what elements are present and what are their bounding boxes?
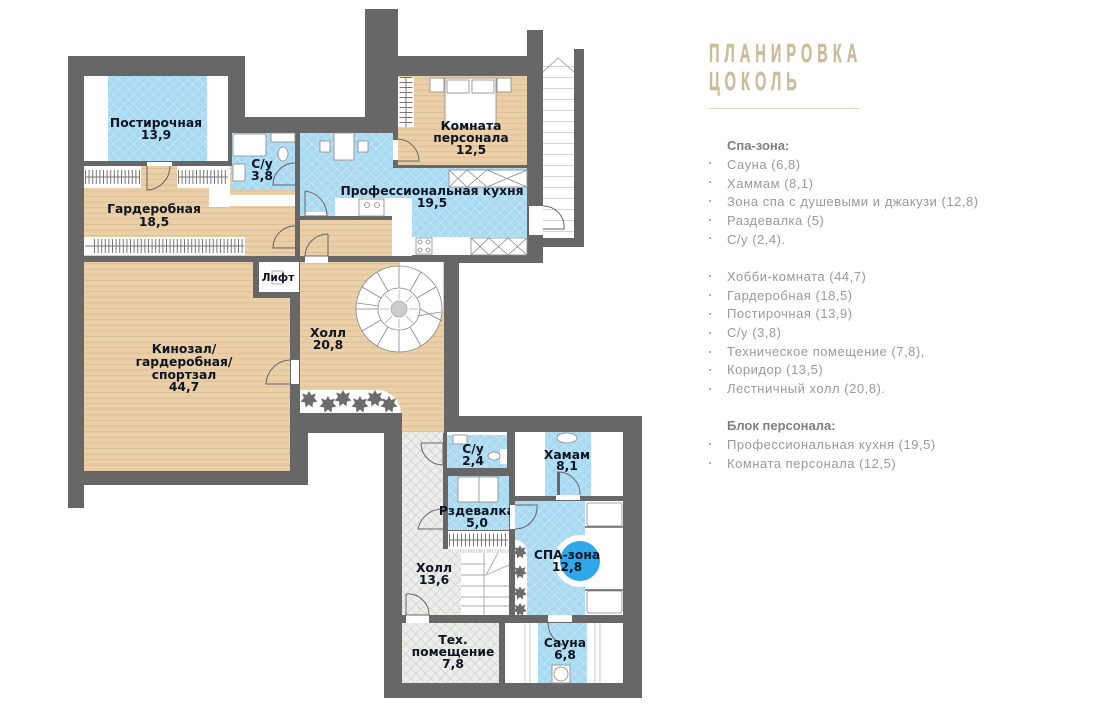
room: Холл 20,8: Холл — [310, 326, 346, 340]
room: Кинозал — [84, 262, 299, 471]
room: СПА-зона: 12,8 — [552, 560, 582, 574]
list: Спа-зона: Сауна (6,8) — [727, 157, 801, 172]
room: С/у 3,8: 3,8 — [251, 169, 273, 183]
planter: Холл — [300, 390, 401, 413]
room: Постирочная — [84, 76, 228, 161]
room: Постирочная: Постирочная — [110, 116, 202, 130]
room: Сауна — [505, 615, 623, 683]
room: Профессиональная кухня: 19,5 — [417, 196, 447, 210]
room: Холл 13,6: 13,6 — [419, 573, 449, 587]
room: Комната персонала: персонала — [433, 131, 509, 145]
room: С/у 3,8: С/у — [251, 157, 273, 171]
list: Спа-зона: Раздевалка (5) — [727, 213, 824, 228]
list: Блок персонала — [709, 418, 936, 471]
list: помещения: Техническое помещение (7,8), — [727, 344, 925, 359]
lift: Лифт — [262, 272, 295, 284]
list: Спа-зона: Зона спа с душевыми и джакузи (12,8) — [727, 194, 979, 209]
lift — [259, 262, 299, 292]
room: Тех. помещение: помещение — [412, 645, 494, 659]
room: С/у 2,4 — [447, 432, 507, 468]
room: Кинозал: Кинозал/ — [152, 342, 217, 356]
room: Хамам: Хамам — [544, 448, 590, 462]
room: Сауна: 6,8 — [554, 648, 576, 662]
room: С/у 3,8 — [232, 133, 295, 190]
room: Гардеробная — [84, 162, 295, 256]
outer stair — [529, 49, 584, 247]
room: Рздевалка — [439, 476, 515, 549]
list: помещения: Гардеробная (18,5) — [727, 288, 853, 303]
room: Комната персонала — [393, 76, 527, 165]
title: ПЛАНИРОВКА — [709, 40, 862, 68]
list: помещения: Постирочная (13,9) — [727, 306, 853, 321]
room: Тех. помещение: 7,8 — [442, 657, 464, 671]
room: Холл 13,6: Холл — [416, 561, 452, 575]
room: СПА-зона — [510, 501, 623, 616]
room: Комната персонала: Комната — [441, 119, 501, 133]
room: Комната персонала: 12,5 — [456, 143, 486, 157]
room: С/у 2,4: 2,4 — [462, 454, 484, 468]
room: Тех. помещение: Тех. — [438, 633, 468, 647]
room: Сауна: Сауна — [544, 636, 586, 650]
room: Гардеробная: Гардеробная — [107, 202, 201, 216]
list: Блок персонала: Комната персонала (12,5) — [727, 456, 896, 471]
room: Холл 20,8: 20,8 — [313, 338, 343, 352]
list: Спа-зона: Спа-зона: — [727, 138, 789, 153]
divider — [707, 108, 860, 109]
title — [709, 40, 862, 96]
room: Рздевалка: Рздевалка — [439, 504, 515, 518]
list: Блок персонала: Блок персонала: — [727, 418, 836, 433]
room: Хамам — [515, 432, 623, 500]
title: ЦОКОЛЬ — [709, 68, 802, 96]
room: С/у 2,4: С/у — [462, 442, 484, 456]
room: Кинозал: спортзал — [152, 368, 216, 382]
room: Гардеробная: 18,5 — [139, 215, 169, 229]
room: кладовая — [300, 220, 392, 259]
room: Холл 13,6 — [402, 432, 509, 623]
room: Холл 20,8 — [300, 259, 444, 433]
list: Блок персонала: Профессиональная кухня (19,5) — [727, 437, 936, 452]
list: помещения: Коридор (13,5) — [727, 362, 823, 377]
spiral stair — [356, 266, 442, 352]
walls: floor plan shell — [68, 9, 642, 698]
room: Профессиональная кухня: Профессиональная кухня — [341, 184, 523, 198]
list: помещения: Лестничный холл (20,8). — [727, 381, 885, 396]
room: Профессиональная кухня — [300, 133, 527, 256]
list: помещения — [709, 269, 925, 396]
room: СПА-зона: СПА-зона — [534, 548, 600, 562]
room: Кинозал: гардеробная/ — [136, 355, 233, 369]
room: Хамам: 8,1 — [556, 459, 578, 473]
list: Спа-зона: Хаммам (8,1) — [727, 176, 814, 191]
list: Спа-зона: С/у (2,4). — [727, 232, 786, 247]
list: Спа-зона — [709, 138, 979, 247]
room: Тех. помещение — [402, 623, 499, 683]
room: Постирочная: 13,9 — [141, 128, 171, 142]
room: Рздевалка: 5,0 — [466, 516, 488, 530]
list: помещения: С/у (3,8) — [727, 325, 782, 340]
room: Кинозал: 44,7 — [169, 380, 199, 394]
list: помещения: Хобби-комната (44,7) — [727, 269, 866, 284]
